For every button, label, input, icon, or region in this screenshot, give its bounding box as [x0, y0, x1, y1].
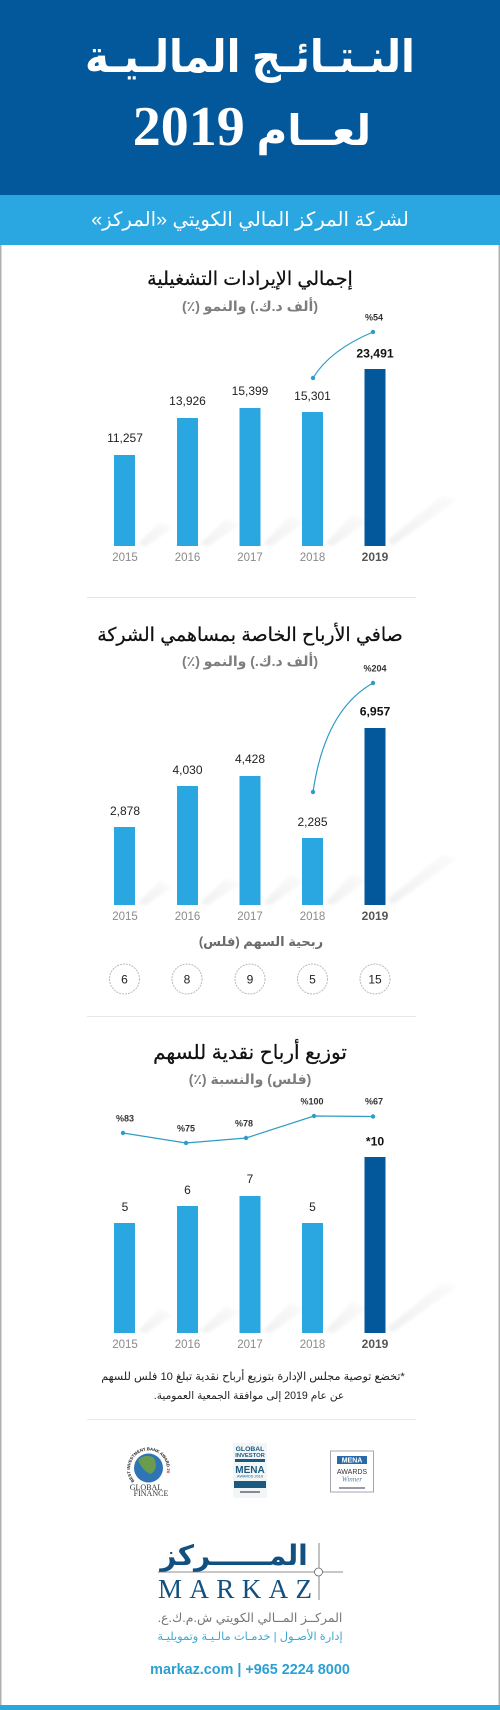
earnings per share circles: 6: [121, 972, 128, 986]
logo latin wordmark: MARKAZ: [158, 1574, 312, 1604]
icon: global finance award: BEST INVESTMENT BANK AWARD 2019: [127, 1448, 170, 1483]
bar chart: 2018: [300, 552, 325, 564]
title line 2: لعــام 2019: [133, 96, 371, 158]
bar chart: 2018: [300, 911, 325, 923]
earnings per share circles: 8: [184, 972, 191, 986]
growth arrow: [311, 312, 383, 380]
earnings per share circles: 9: [247, 972, 254, 986]
bar chart: 4,030: [172, 763, 203, 777]
payout ratio line: %75: [177, 1124, 195, 1134]
icon: global finance award: [127, 1448, 170, 1498]
bar chart: 2015: [112, 911, 138, 923]
subtitle band: [0, 195, 500, 245]
bar chart: 7: [247, 1172, 254, 1186]
bar chart: 2017: [237, 552, 263, 564]
logo cross lines: [158, 1543, 343, 1600]
bar chart: 15,301: [294, 389, 331, 403]
header banner: [0, 0, 500, 195]
payout ratio line: %67: [365, 1096, 383, 1106]
bar chart: *10: [366, 1134, 384, 1148]
panel: awards: [127, 1443, 374, 1498]
bar chart: 2,285: [297, 815, 328, 829]
bar chart: 2016: [175, 1339, 200, 1351]
icon: mena awards: AWARDS: [337, 1469, 367, 1476]
logo: Markaz: [157, 1540, 343, 1644]
footnote: عن عام 2019 إلى موافقة الجمعية العمومية.: [154, 1390, 344, 1402]
bar chart: 4,428: [235, 752, 265, 766]
icon: global investor award: AWARDS 2019: [237, 1474, 263, 1478]
company name: المركــز المــالي الكويتي ش.م.ك.ع.: [158, 1611, 342, 1626]
icon: global investor award: [233, 1443, 267, 1498]
tagline: إدارة الأصـول | خدمـات مالـيـة وتمويليـة: [157, 1629, 343, 1644]
bar chart: [112, 1134, 458, 1351]
sub heading: (فلس) والنسبة (٪): [189, 1071, 311, 1088]
payout ratio line: %100: [300, 1096, 324, 1106]
heading: إجمالي الإيرادات التشغيلية: [147, 269, 353, 291]
icon: global investor award: GLOBAL: [236, 1446, 264, 1453]
bar chart: 2016: [175, 911, 200, 923]
footnote: [101, 1369, 405, 1402]
earnings per share circles: 5: [309, 972, 316, 986]
title line 1: النـتـائـج المالـيـة: [85, 32, 415, 84]
bar chart: 5: [122, 1200, 129, 1214]
bar chart: 2,878: [110, 804, 140, 818]
icon: global finance award: GLOBAL: [130, 1483, 162, 1492]
bar chart: 2017: [237, 911, 263, 923]
earnings per share circles: [110, 964, 390, 994]
growth arrow: [311, 664, 387, 794]
bar chart: 5: [309, 1200, 316, 1214]
icon: global investor award: INVESTOR: [235, 1453, 266, 1459]
sub heading: (ألف د.ك.) والنمو (٪): [182, 652, 318, 670]
footnote: *تخضع توصية مجلس الإدارة بتوزيع أرباح نقدية تبلغ 10 فلس للسهم: [101, 1369, 405, 1384]
bar chart: [107, 346, 458, 564]
heading: توزيع أرباح نقدية للسهم: [153, 1039, 347, 1064]
icon: mena awards: MENA: [342, 1458, 362, 1464]
icon: global investor award: MENA: [235, 1465, 265, 1476]
icon: mena awards: [330, 1451, 374, 1492]
icon: global finance award: FINANCE: [134, 1489, 168, 1498]
bar chart: 15,399: [232, 384, 269, 398]
bar chart: 23,491: [356, 346, 394, 360]
earnings per share circles: 15: [368, 972, 382, 986]
payout ratio line: %83: [116, 1114, 134, 1124]
payout ratio line: %78: [235, 1118, 253, 1128]
bar chart: 2018: [300, 1339, 325, 1351]
panel: net profit: [97, 623, 458, 994]
heading: صافي الأرباح الخاصة بمساهمي الشركة: [97, 623, 403, 646]
footer band: [0, 1705, 500, 1710]
logo arabic wordmark: المــــــركز: [158, 1540, 308, 1572]
earnings per share heading: ربحية السهم (فلس): [199, 934, 323, 949]
bar chart: [110, 704, 458, 923]
subtitle band: لشركة المركز المالي الكويتي «المركز»: [91, 209, 409, 231]
growth arrow: %54: [365, 312, 383, 322]
bar chart: 2017: [237, 1339, 263, 1351]
panel: operating revenue: [107, 269, 458, 564]
bar chart: 2019: [362, 909, 389, 923]
bar chart: 2015: [112, 1339, 138, 1351]
sub heading: (ألف د.ك.) والنمو (٪): [182, 297, 318, 315]
payout ratio line: [116, 1096, 383, 1145]
bar chart: 2015: [112, 552, 138, 564]
contact line: markaz.com | +965 2224 8000: [150, 1662, 350, 1678]
bar chart: 2016: [175, 552, 200, 564]
bar chart: 2019: [362, 550, 389, 564]
bar chart: 6,957: [360, 704, 390, 718]
bar chart: 13,926: [169, 394, 206, 408]
panel: cash dividends: [101, 1039, 458, 1402]
bar chart: 6: [184, 1183, 191, 1197]
icon: mena awards: Winner: [342, 1476, 362, 1484]
growth arrow: %204: [363, 664, 387, 674]
bar chart: 11,257: [107, 431, 143, 445]
bar chart: 2019: [362, 1337, 389, 1351]
